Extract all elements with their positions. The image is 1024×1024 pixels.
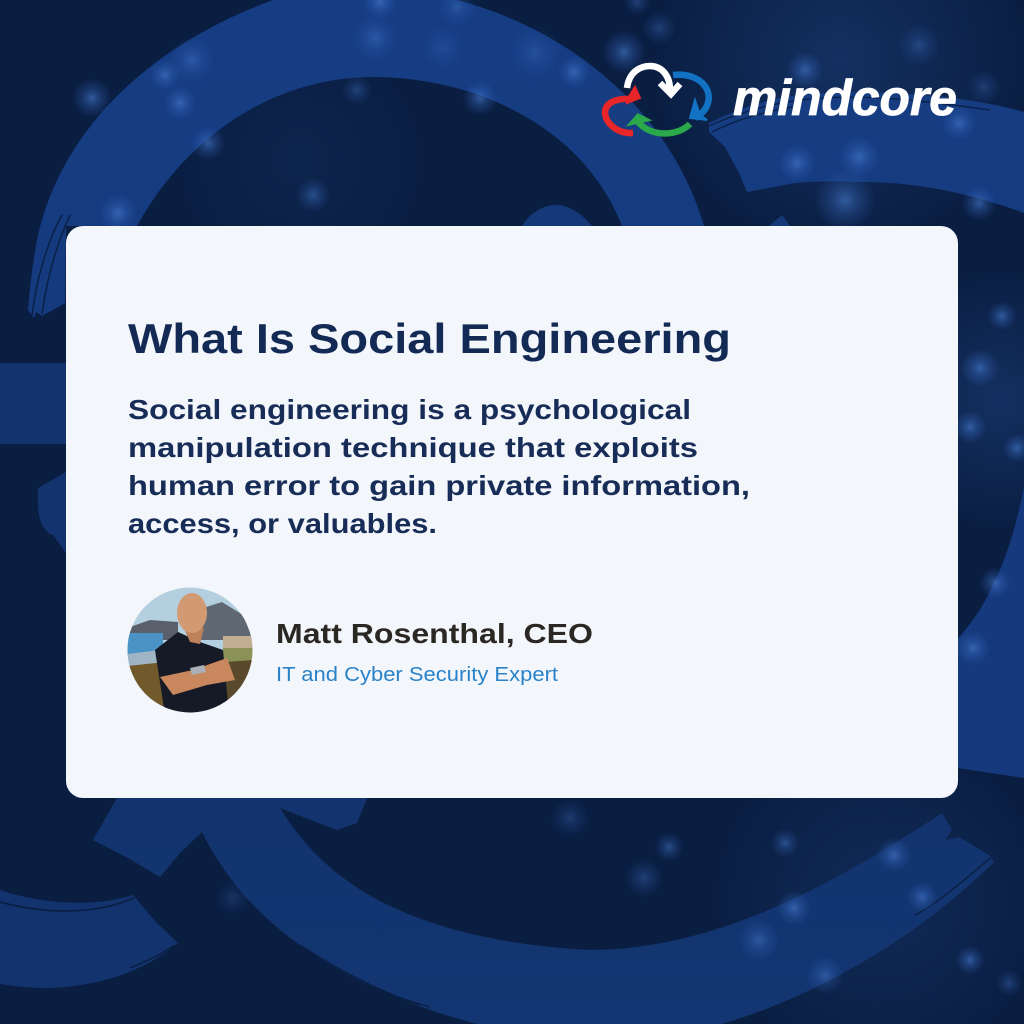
- brush stroke: ring slits: [32, 215, 70, 316]
- brush stroke: lower ring slits: [250, 858, 990, 1007]
- text block: definition: [128, 394, 750, 539]
- text block: definition: manipulation technique that exploits: [128, 432, 698, 463]
- text block: definition: Social engineering is a psychological: [128, 394, 691, 425]
- logo: mindcore: [605, 66, 957, 134]
- icon: green arrow: [630, 115, 690, 134]
- brush stroke: left band: [0, 363, 66, 444]
- brush stroke: upper ring: [28, 0, 704, 318]
- text block: definition: human error to gain private information,: [128, 470, 750, 501]
- text block: definition: access, or valuables.: [128, 508, 437, 539]
- logo wordmark: mindcore: [733, 70, 957, 126]
- brush stroke: sweep slits: [709, 97, 990, 132]
- panel: main card: [66, 226, 958, 798]
- brush stroke: lower left sweep: [0, 890, 178, 988]
- author name: Matt Rosenthal, CEO: [276, 618, 593, 649]
- portrait: Matt Rosenthal: [127, 587, 253, 715]
- icon: blue arrow: [673, 75, 709, 120]
- icon: white arrow: [627, 66, 680, 94]
- heading: What Is Social Engineering: [128, 315, 731, 362]
- brush stroke: lower ring: [93, 798, 994, 1024]
- brush stroke: lower left slits: [0, 898, 175, 968]
- brush stroke: small bump behind card: [522, 205, 790, 226]
- brush stroke: upper right sweep: [709, 92, 1024, 213]
- brush stroke: left small fragment: [38, 472, 66, 553]
- brush stroke: right fragment: [958, 487, 1024, 778]
- author title: IT and Cyber Security Expert: [276, 664, 558, 686]
- icon: red arrow: [605, 87, 640, 133]
